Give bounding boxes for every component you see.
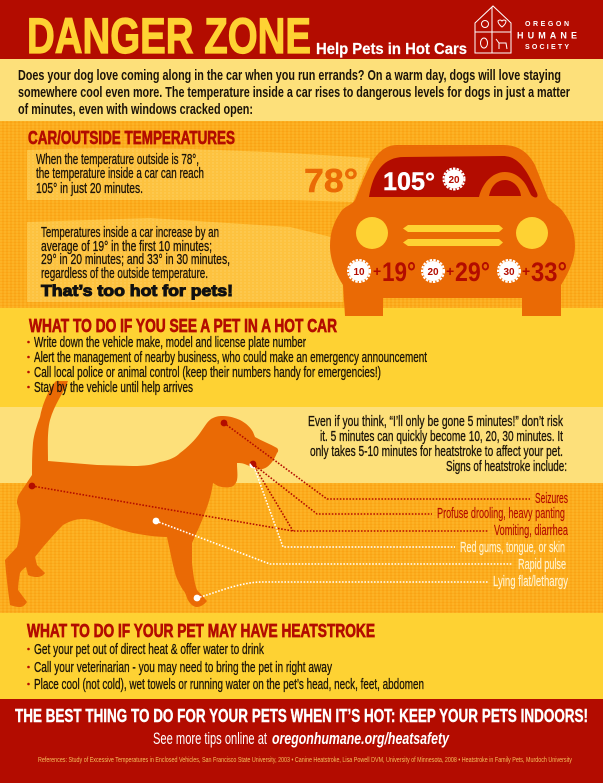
icon: 30 minute timer <box>498 260 520 282</box>
icon: 10 minute timer: 10 <box>353 267 365 278</box>
heading: car/outside temperatures: CAR/OUTSIDE TEMPERATURES <box>28 128 235 148</box>
diagram: symptom leader lines <box>29 420 530 601</box>
labels: heatstroke symptoms: Seizures <box>535 490 568 507</box>
list: actions if you see a pet in a hot car <box>27 334 428 396</box>
labels: heatstroke symptoms: Rapid pulse <box>518 556 566 573</box>
panel: what to do if your pet may have heatstroke <box>0 613 603 699</box>
logo wordmark <box>517 21 577 51</box>
footer link line: See more tips online at <box>153 729 267 748</box>
icon: house with pets <box>475 6 511 53</box>
outside temperature 78: 78° <box>304 162 358 199</box>
heading: heatstroke: WHAT TO DO IF YOUR PET MAY HAVE HEATSTROKE <box>27 621 375 641</box>
headlights <box>356 217 548 249</box>
list: actions if you see a pet in a hot car: Call local police or animal control (keep their numbers handy for emergencies!) <box>34 364 381 381</box>
list: first aid: Get your pet out of direct heat & offer water to drink <box>34 641 264 658</box>
text: temperature increase: Temperatures inside a car increase by an <box>41 224 219 241</box>
logo: Oregon Humane Society <box>475 6 577 53</box>
list: actions if you see a pet in a hot car: Write down the vehicle make, model and license plate number <box>34 334 306 351</box>
list: actions if you see a pet in a hot car: Stay by the vehicle until help arrives <box>34 379 193 396</box>
plus 19 degrees: + <box>373 263 381 279</box>
text: 78 degree example: When the temperature outside is 78°, <box>36 151 199 168</box>
icon: 20 minute timer <box>444 168 464 190</box>
plus 19 degrees <box>373 257 416 287</box>
footer band <box>0 699 603 783</box>
footer link line <box>153 729 450 748</box>
labels: heatstroke symptoms <box>437 490 568 590</box>
plus 33 degrees: 33° <box>531 257 567 287</box>
subtitle: Help Pets in Hot Cars <box>316 41 467 58</box>
callout: too hot for pets: That’s too hot for pets! <box>41 283 233 300</box>
header band <box>0 0 603 64</box>
logo wordmark: HUMANE <box>517 30 577 40</box>
plus 19 degrees: 19° <box>382 257 416 287</box>
text: 78 degree example <box>36 151 204 197</box>
title: DANGER ZONE <box>27 8 311 64</box>
text: temperature increase <box>41 224 230 282</box>
plus 33 degrees: + <box>522 263 530 279</box>
text: heatstroke warning <box>308 413 567 475</box>
intro panel <box>0 59 603 121</box>
panel: what to do if you see a pet in a hot car <box>0 308 603 407</box>
heading: see a pet: WHAT TO DO IF YOU SEE A PET IN A HOT CAR <box>29 316 337 336</box>
grille <box>403 225 503 246</box>
inside temperature 105: 105° <box>383 168 435 196</box>
plus 29 degrees: 29° <box>455 257 490 287</box>
list: first aid: Call your veterinarian - you may need to bring the pet in right away <box>34 659 332 676</box>
plus 29 degrees: + <box>446 263 454 279</box>
illustration: car <box>330 145 575 316</box>
list: first aid <box>27 641 424 693</box>
text: temperature increase: 29° in 20 minutes; and 33° in 30 minutes, <box>41 251 230 268</box>
intro text: of minutes, even with windows cracked open: <box>18 101 253 118</box>
text: 78 degree example: 105° in just 20 minutes. <box>36 180 143 197</box>
text: 78 degree example: the temperature inside a car can reach <box>36 165 204 182</box>
logo wordmark: OREGON <box>525 21 569 28</box>
icon: 10 minute timer <box>348 260 370 282</box>
icon: 20 minute timer <box>422 260 444 282</box>
text: temperature increase: average of 19° in the first 10 minutes; <box>41 238 212 255</box>
panel: heatstroke signs background <box>0 407 603 613</box>
icon: 20 minute timer: 20 <box>448 175 460 186</box>
logo wordmark: SOCIETY <box>525 44 569 51</box>
text: temperature increase: regardless of the outside temperature. <box>41 265 208 282</box>
footer link line: oregonhumane.org/heatsafety <box>272 729 450 748</box>
panel: car and outside temperatures <box>0 121 603 308</box>
windshield <box>369 156 538 197</box>
icon: 30 minute timer: 30 <box>503 267 515 278</box>
steering wheel <box>489 180 521 196</box>
intro text <box>18 67 570 118</box>
icon: 20 minute timer: 20 <box>427 267 439 278</box>
illustration: dog silhouette <box>5 381 278 607</box>
